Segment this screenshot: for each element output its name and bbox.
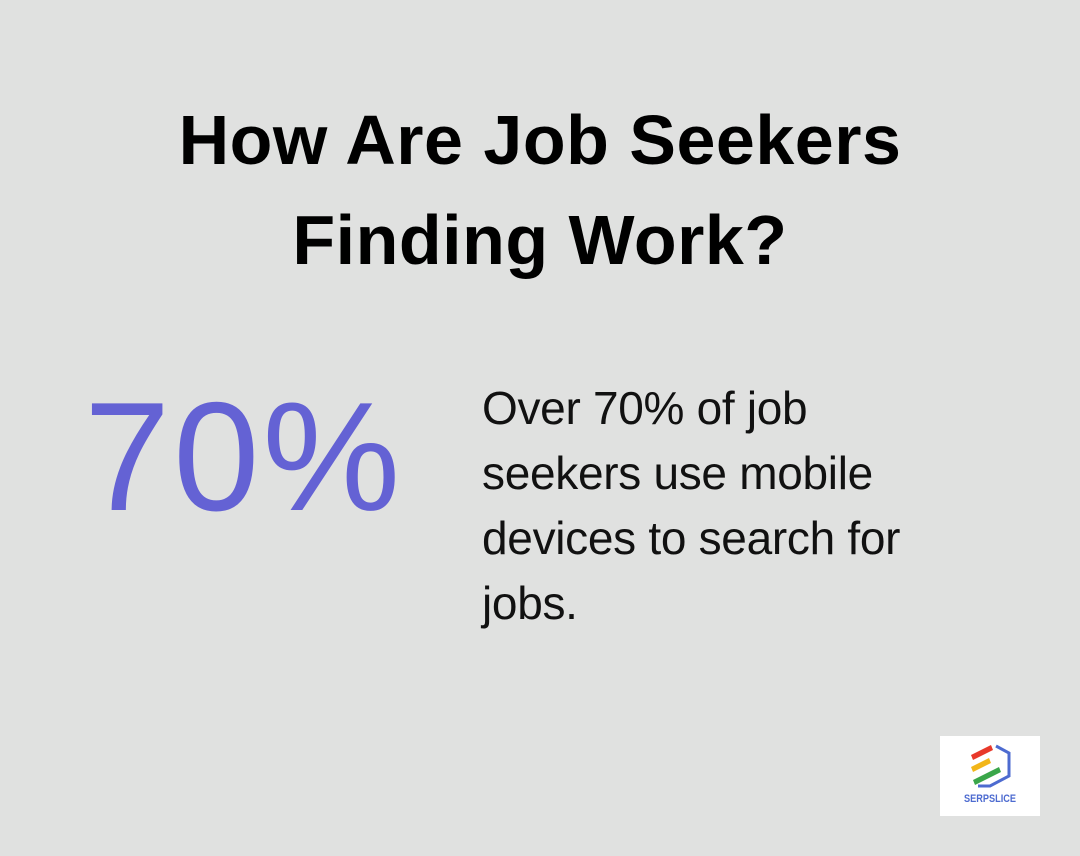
title: Finding Work?: [292, 201, 788, 279]
logo: SerpSlice: SERPSLICE: [964, 793, 1016, 805]
description text: Over 70% of job seekers use mobile devices to search for jobs.: [482, 382, 900, 629]
big stat: 70%: 70%: [84, 370, 403, 543]
logo: SerpSlice: [940, 736, 1040, 816]
title: How Are Job Seekers: [179, 101, 901, 179]
title: [179, 101, 901, 279]
